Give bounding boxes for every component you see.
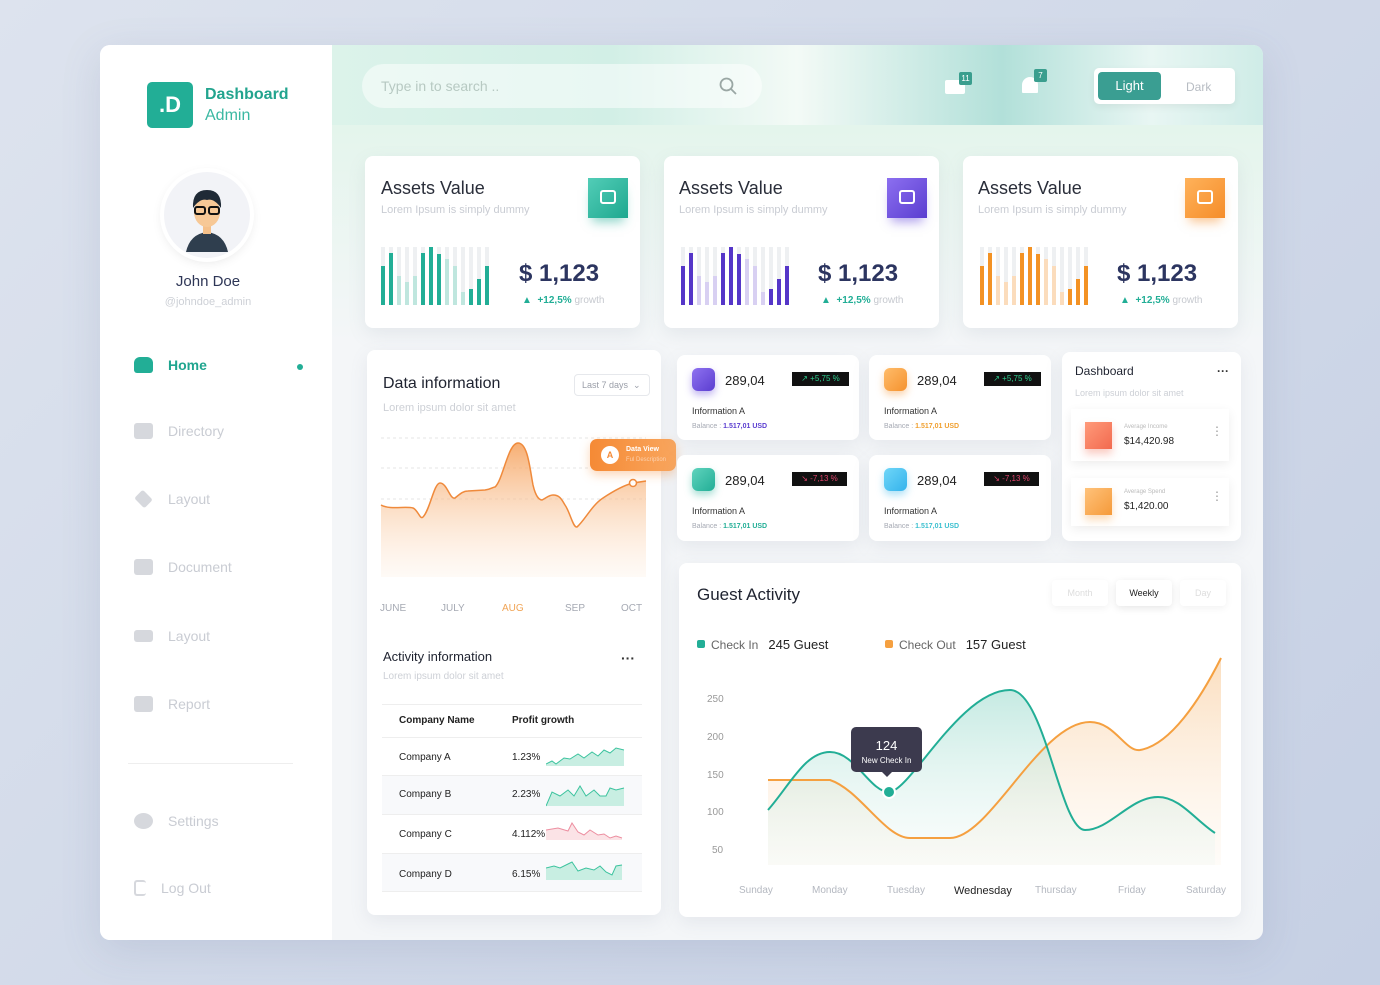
panel: data information: Last 7 days ⌄ — [582, 380, 641, 390]
nav: layout: Layout — [168, 491, 210, 507]
table: activity: 6.15% — [512, 869, 540, 880]
nav: home — [134, 357, 207, 373]
asset cards — [365, 156, 640, 328]
panel: dashboard summary — [1062, 352, 1241, 541]
info card 2: Balance : 1.517,01 USD — [884, 423, 959, 430]
panel: guest activity: Day — [1195, 588, 1211, 598]
panel: guest activity: Friday — [1118, 885, 1146, 896]
panel: data information: OCT — [621, 603, 642, 614]
theme toggle: Light — [1115, 78, 1144, 93]
panel: guest activity: Monday — [812, 885, 848, 896]
panel: dashboard summary: $1,420.00 — [1124, 501, 1168, 512]
panel: data information: Lorem ipsum dolor sit amet — [383, 671, 504, 682]
panel: guest activity: 100 — [707, 807, 724, 818]
icon: mail: 11 — [961, 74, 970, 83]
panel: guest activity: 250 — [707, 694, 724, 705]
nav: logout — [134, 880, 211, 896]
nav: directory — [134, 423, 224, 439]
nav: logout: Log Out — [161, 880, 211, 896]
info card 1 — [677, 355, 859, 440]
info card 4 — [869, 455, 1051, 541]
info card 1: ↗ +5,75 % — [801, 374, 840, 383]
panel: data information: AUG — [502, 603, 524, 614]
info card 1: Information A — [692, 406, 745, 416]
panel: data information: Lorem ipsum dolor sit amet — [383, 402, 516, 414]
panel: guest activity: Sunday — [739, 885, 773, 896]
nav: layout 2: Layout — [168, 628, 210, 644]
asset cards: Assets Value — [381, 178, 485, 198]
nav: document — [134, 559, 232, 575]
info card 3: Information A — [692, 506, 745, 516]
nav: directory: Directory — [168, 423, 224, 439]
tooltip: 124 new check in: 124 — [876, 738, 897, 753]
icon: bell — [1022, 69, 1047, 93]
main frame — [100, 45, 1263, 940]
table: activity: Company B — [399, 789, 451, 800]
table: activity: 4.112% — [512, 829, 545, 840]
panel: data information: Data information — [383, 375, 500, 392]
panel: guest activity — [679, 563, 1241, 917]
info card 2 — [869, 355, 1051, 440]
asset cards: $ 1,123 — [519, 260, 599, 287]
panel: guest activity: Tuesday — [887, 885, 925, 896]
text: Lorem Ipsum is simply dummy — [978, 204, 1127, 216]
info card 4: ↘ -7,13 % — [993, 474, 1030, 483]
panel: guest activity: 200 — [707, 732, 724, 743]
nav: settings — [134, 813, 219, 829]
info card 3: ↘ -7,13 % — [801, 474, 838, 483]
table: activity: 1.23% — [512, 752, 540, 763]
text: Lorem Ipsum is simply dummy — [679, 204, 828, 216]
table: activity: 2.23% — [512, 789, 540, 800]
panel: dashboard summary: $14,420.98 — [1124, 436, 1174, 447]
avatar — [164, 172, 250, 258]
panel: data information — [367, 350, 661, 915]
callout: data view: A — [607, 450, 613, 460]
callout: data view: Data View — [626, 446, 659, 453]
nav: settings: Settings — [168, 813, 219, 829]
panel: guest activity: Check In 245 Guest — [711, 637, 828, 652]
theme toggle — [1094, 68, 1235, 104]
nav: layout — [135, 490, 210, 508]
logo — [147, 82, 289, 128]
table: activity: Company D — [399, 869, 452, 880]
text: ▲ +12,5% growth — [821, 295, 903, 306]
panel: guest activity: Saturday — [1186, 885, 1226, 896]
panel: guest activity: Thursday — [1035, 885, 1077, 896]
nav: layout 2 — [134, 628, 210, 644]
panel: dashboard summary: Average Income — [1124, 424, 1168, 430]
icon: mail — [945, 72, 972, 94]
text: $ 1,123 — [818, 260, 898, 287]
user name: John Doe — [176, 273, 240, 290]
asset cards: ▲ +12,5% growth — [522, 295, 604, 306]
nav: document: Document — [168, 559, 232, 575]
header band — [332, 45, 1263, 125]
panel: dashboard summary: ⋮ — [1211, 424, 1223, 438]
info card 1: 289,04 — [725, 373, 765, 388]
tooltip: 124 new check in: New Check In — [862, 756, 911, 765]
table: activity: Profit growth — [512, 715, 574, 726]
panel: guest activity: Wednesday — [954, 885, 1012, 897]
panel: guest activity: 50 — [712, 845, 723, 856]
text: Assets Value — [679, 178, 783, 198]
sidebar — [100, 45, 332, 940]
info card 3 — [677, 455, 859, 541]
table: activity: Company A — [399, 752, 451, 763]
logo: Admin — [205, 107, 250, 124]
search bar — [362, 64, 762, 108]
panel: guest activity: Guest Activity — [697, 585, 800, 604]
search bar: Type in to search .. — [381, 78, 499, 94]
logo: Dashboard — [205, 86, 289, 103]
text: ▲ +12,5% growth — [1120, 295, 1202, 306]
callout: data view: Ful Description — [626, 457, 666, 463]
info card 4: Balance : 1.517,01 USD — [884, 523, 959, 530]
sidebar: @johndoe_admin — [165, 296, 251, 308]
panel: dashboard summary: ⋮ — [1211, 489, 1223, 503]
panel: data information: ··· — [621, 650, 635, 666]
info card 2: ↗ +5,75 % — [993, 374, 1032, 383]
panel: data information: JUNE — [380, 603, 406, 614]
panel: dashboard summary: Dashboard — [1075, 364, 1134, 378]
panel: dashboard summary: Lorem ipsum dolor sit amet — [1075, 388, 1184, 398]
text: $ 1,123 — [1117, 260, 1197, 287]
panel: dashboard summary: ··· — [1217, 364, 1229, 378]
panel: guest activity: 150 — [707, 770, 724, 781]
panel: dashboard summary: Average Spend — [1124, 489, 1165, 495]
logo: .D — [159, 92, 181, 117]
callout: data view — [590, 439, 676, 471]
info card 4: 289,04 — [917, 473, 957, 488]
tooltip: 124 new check in — [851, 727, 922, 772]
table: activity: Company Name — [399, 715, 475, 726]
panel: guest activity: Month — [1067, 588, 1092, 598]
asset cards: Lorem Ipsum is simply dummy — [381, 204, 530, 216]
text: Assets Value — [978, 178, 1082, 198]
icon: bell: 7 — [1038, 71, 1043, 80]
info card 2: 289,04 — [917, 373, 957, 388]
panel: guest activity: Weekly — [1129, 588, 1159, 598]
table: activity — [382, 704, 642, 892]
panel: guest activity: Check Out 157 Guest — [899, 637, 1026, 652]
info card 2: Information A — [884, 406, 937, 416]
info card 3: Balance : 1.517,01 USD — [692, 523, 767, 530]
nav: home: Home — [168, 357, 207, 373]
panel: data information: Activity information — [383, 649, 492, 664]
info card 1: Balance : 1.517,01 USD — [692, 423, 767, 430]
nav: report — [134, 696, 210, 712]
info card 4: Information A — [884, 506, 937, 516]
table: activity: Company C — [399, 829, 452, 840]
info card 3: 289,04 — [725, 473, 765, 488]
panel: data information: JULY — [441, 603, 465, 614]
theme toggle: Dark — [1186, 80, 1211, 94]
panel: data information: SEP — [565, 603, 585, 614]
nav: report: Report — [168, 696, 210, 712]
